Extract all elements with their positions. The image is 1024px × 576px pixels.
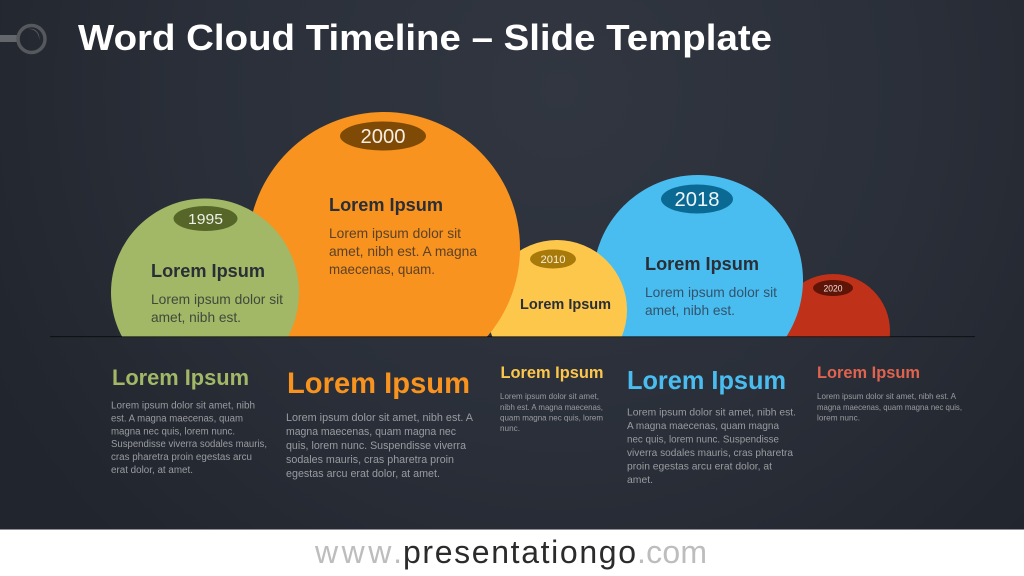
body text: quis, lorem nunc. Suspendisse viverra <box>286 440 467 452</box>
circle text: blue: Lorem Ipsum <box>645 253 759 274</box>
body text: quam magna nec quis, lorem <box>500 412 603 422</box>
footer band <box>0 529 1024 576</box>
circle text: orange <box>329 194 477 277</box>
column: yellow <box>500 364 604 433</box>
badge: 2010: 2010 <box>540 254 566 266</box>
body text: erat dolor, at amet. <box>111 465 193 476</box>
body text: magna maecenas, quam magna nec quis, <box>817 402 962 412</box>
circle text: green: Lorem ipsum dolor sit <box>151 291 283 307</box>
circle text: green: amet, nibh est. <box>151 309 241 325</box>
column: green <box>111 365 267 476</box>
body text: Lorem ipsum dolor sit amet, <box>500 391 599 401</box>
badge: 2020 <box>813 280 853 296</box>
heading: Lorem Ipsum <box>500 364 604 382</box>
circle text: blue <box>645 253 777 318</box>
badge: 2000: 2000 <box>360 126 406 148</box>
body text: cras pharetra proin egestas arcu <box>111 452 252 463</box>
footer url: www. <box>314 534 402 570</box>
circle: 2010 yellow <box>490 240 627 337</box>
circle text: blue: amet, nibh est. <box>645 302 735 318</box>
heading: Lorem Ipsum <box>287 367 470 400</box>
title: Word Cloud Timeline – Slide Template <box>78 17 772 58</box>
circle: 2018 blue <box>596 175 803 337</box>
body text: A magna maecenas, quam magna <box>627 420 779 432</box>
body text <box>111 400 267 476</box>
baseline <box>50 336 975 337</box>
footer url: .com <box>637 534 707 570</box>
body text: egestas arcu erat dolor, at amet. <box>286 468 440 480</box>
body text <box>627 406 796 486</box>
circle text: green: Lorem Ipsum <box>151 260 265 281</box>
body text: amet. <box>627 474 653 486</box>
circle text: green <box>151 260 283 325</box>
column: red <box>817 363 962 422</box>
body text: lorem nunc. <box>817 412 860 422</box>
body text: est. A magna maecenas, quam <box>111 414 243 424</box>
body text: Lorem ipsum dolor sit amet, nibh est. A <box>286 412 474 424</box>
body text: magna maecenas, quam magna nec <box>286 426 456 438</box>
body text: Suspendisse viverra sodales mauris, <box>111 439 267 450</box>
badge: 1995: 1995 <box>188 211 223 228</box>
circle text: yellow: Lorem Ipsum <box>520 297 611 313</box>
body text: Lorem ipsum dolor sit amet, nibh est. A <box>817 391 956 401</box>
body text: viverra sodales mauris, cras pharetra <box>627 447 793 459</box>
body text: Lorem ipsum dolor sit amet, nibh <box>111 400 255 412</box>
circle: 1995 green <box>111 198 299 337</box>
circle text: blue: Lorem ipsum dolor sit <box>645 284 777 300</box>
icon: magnifier ring logo <box>0 26 45 52</box>
badge: 2018 <box>661 184 733 214</box>
body text: nibh est. A magna maecenas, <box>500 402 603 412</box>
circle: 2020 red <box>786 274 890 337</box>
circle text: orange: Lorem Ipsum <box>329 194 443 215</box>
footer url <box>314 534 707 570</box>
body text: proin egestas arcu erat dolor, at <box>627 460 772 472</box>
badge: 2000 <box>340 122 426 150</box>
circle text: orange: maecenas, quam. <box>329 261 435 277</box>
body text <box>500 391 603 433</box>
badge: 1995 <box>174 206 238 231</box>
heading: Lorem Ipsum <box>112 365 249 390</box>
body text: magna nec quis, lorem nunc. <box>111 426 235 438</box>
timeline circles <box>111 112 890 337</box>
heading: Lorem Ipsum <box>627 365 786 395</box>
body text <box>286 412 474 480</box>
column: orange <box>286 367 474 480</box>
circle: 2000 orange <box>253 112 520 337</box>
body text: sodales mauris, cras pharetra proin <box>286 454 454 466</box>
body text: nunc. <box>500 423 520 433</box>
footer url: presentationgo <box>403 534 636 570</box>
heading: Lorem Ipsum <box>817 363 920 382</box>
badge: 2018: 2018 <box>674 189 720 211</box>
circle text: orange: Lorem ipsum dolor sit <box>329 225 461 241</box>
column: blue <box>627 365 796 486</box>
badge: 2010 <box>530 250 576 268</box>
circle text: orange: amet, nibh est. A magna <box>329 243 477 259</box>
body text: Lorem ipsum dolor sit amet, nibh est. <box>627 406 796 418</box>
body text: nec quis, lorem nunc. Suspendisse <box>627 434 779 446</box>
body text <box>817 391 962 422</box>
badge: 2020: 2020 <box>824 284 842 294</box>
